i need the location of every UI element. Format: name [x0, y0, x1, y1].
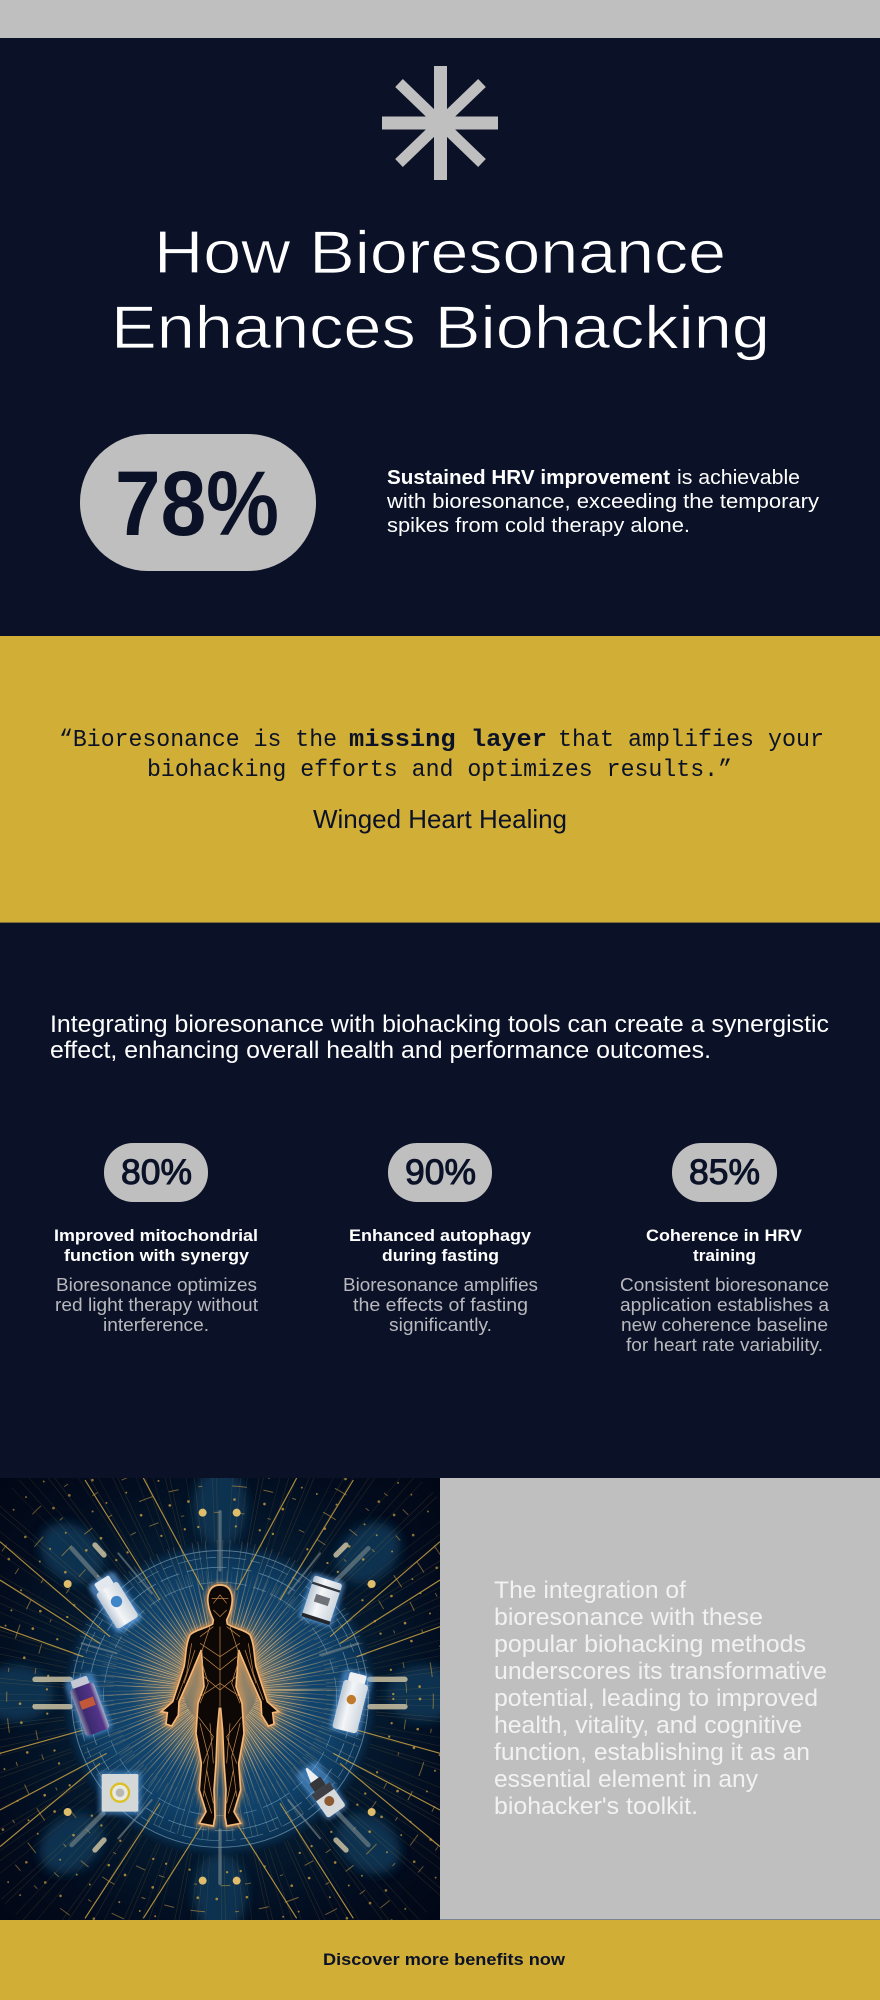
title [111, 219, 770, 361]
bottle: right white [329, 1668, 374, 1736]
icon: asterisk [382, 66, 498, 180]
stat column: 85%: 85% [689, 1153, 760, 1192]
text: sustained HRV improvement: with bioresonance, exceeding the temporary [386, 491, 819, 513]
quote text: that amplifies your [558, 727, 824, 754]
stat column: 90%: during fasting [382, 1246, 499, 1265]
illustration: human figure with supplements and radial circuitry [0, 1478, 440, 1920]
title: Enhances Biohacking [111, 294, 770, 361]
stat column: 90% [343, 1143, 538, 1335]
stat column: 85%: Coherence in HRV [646, 1226, 803, 1245]
conclusion text: popular biohacking methods [494, 1631, 806, 1658]
footer call to action [0, 1920, 880, 2000]
stat column: 85%: for heart rate variability. [626, 1335, 823, 1355]
conclusion text: biohacker's toolkit. [494, 1793, 698, 1820]
conclusion text: potential, leading to improved [494, 1685, 818, 1712]
stat column: 90%: significantly. [389, 1315, 492, 1335]
quote text: missing layer [349, 727, 547, 754]
stat column: 85%: new coherence baseline [621, 1315, 828, 1335]
stat: 78% pill [80, 434, 316, 571]
text: sustained HRV improvement [386, 467, 819, 537]
conclusion text: function, establishing it as an [494, 1739, 810, 1766]
text: integrating intro [50, 1011, 829, 1064]
text: sustained HRV improvement: Sustained HRV improvement [387, 467, 670, 489]
top grey band [0, 0, 880, 38]
text: sustained HRV improvement: is achievable [677, 467, 800, 489]
quote text: “Bioresonance is the [59, 727, 337, 754]
device: square with yellow ring [99, 1771, 141, 1815]
quote text [59, 727, 824, 784]
text: integrating intro: effect, enhancing overall health and performance outcomes. [50, 1037, 711, 1064]
stat column: 80%: Improved mitochondrial [54, 1226, 258, 1245]
stat column: 90%: the effects of fasting [353, 1295, 528, 1315]
quote text: biohacking efforts and optimizes results.” [147, 757, 732, 784]
human figure [161, 1585, 279, 1826]
stat column: 80%: Bioresonance optimizes [56, 1275, 257, 1295]
stat column: 90%: 90% [405, 1153, 476, 1192]
stat column: 90%: Enhanced autophagy [349, 1226, 532, 1245]
stat column: 90%: Bioresonance amplifies [343, 1275, 538, 1295]
conclusion text: bioresonance with these [494, 1604, 763, 1631]
quote attribution: Winged Heart Healing [313, 804, 567, 834]
conclusion text: health, vitality, and cognitive [494, 1712, 802, 1739]
panel: quote [0, 636, 880, 923]
conclusion text: essential element in any [494, 1766, 758, 1793]
stat column: 80%: red light therapy without [55, 1295, 258, 1315]
bottle: top left [87, 1570, 144, 1635]
title: How Bioresonance [154, 219, 726, 286]
stat column: 80% [54, 1143, 258, 1335]
footer call to action: Discover more benefits now [323, 1950, 566, 1969]
bottle: left purple [63, 1671, 113, 1739]
text: sustained HRV improvement: spikes from cold therapy alone. [387, 515, 690, 537]
stat column: 85%: application establishes a [620, 1295, 830, 1315]
jar: top right [298, 1572, 346, 1628]
stat column: 80%: function with synergy [64, 1246, 250, 1265]
conclusion text: The integration of [494, 1577, 686, 1604]
text: integrating intro: Integrating bioresonance with biohacking tools can create a synergistic [50, 1011, 829, 1038]
stat column: 85% [620, 1143, 830, 1355]
panel: grey conclusion [440, 1478, 880, 1920]
stat column: 80%: 80% [121, 1153, 192, 1192]
stat column: 85%: training [693, 1246, 756, 1265]
stat column: 80%: interference. [103, 1315, 209, 1335]
conclusion text: underscores its transformative [494, 1658, 827, 1685]
stat: 78% pill: 78% [115, 453, 279, 555]
conclusion text [494, 1577, 827, 1820]
stat column: 85%: Consistent bioresonance [620, 1275, 829, 1295]
dropper bottle [295, 1760, 349, 1822]
